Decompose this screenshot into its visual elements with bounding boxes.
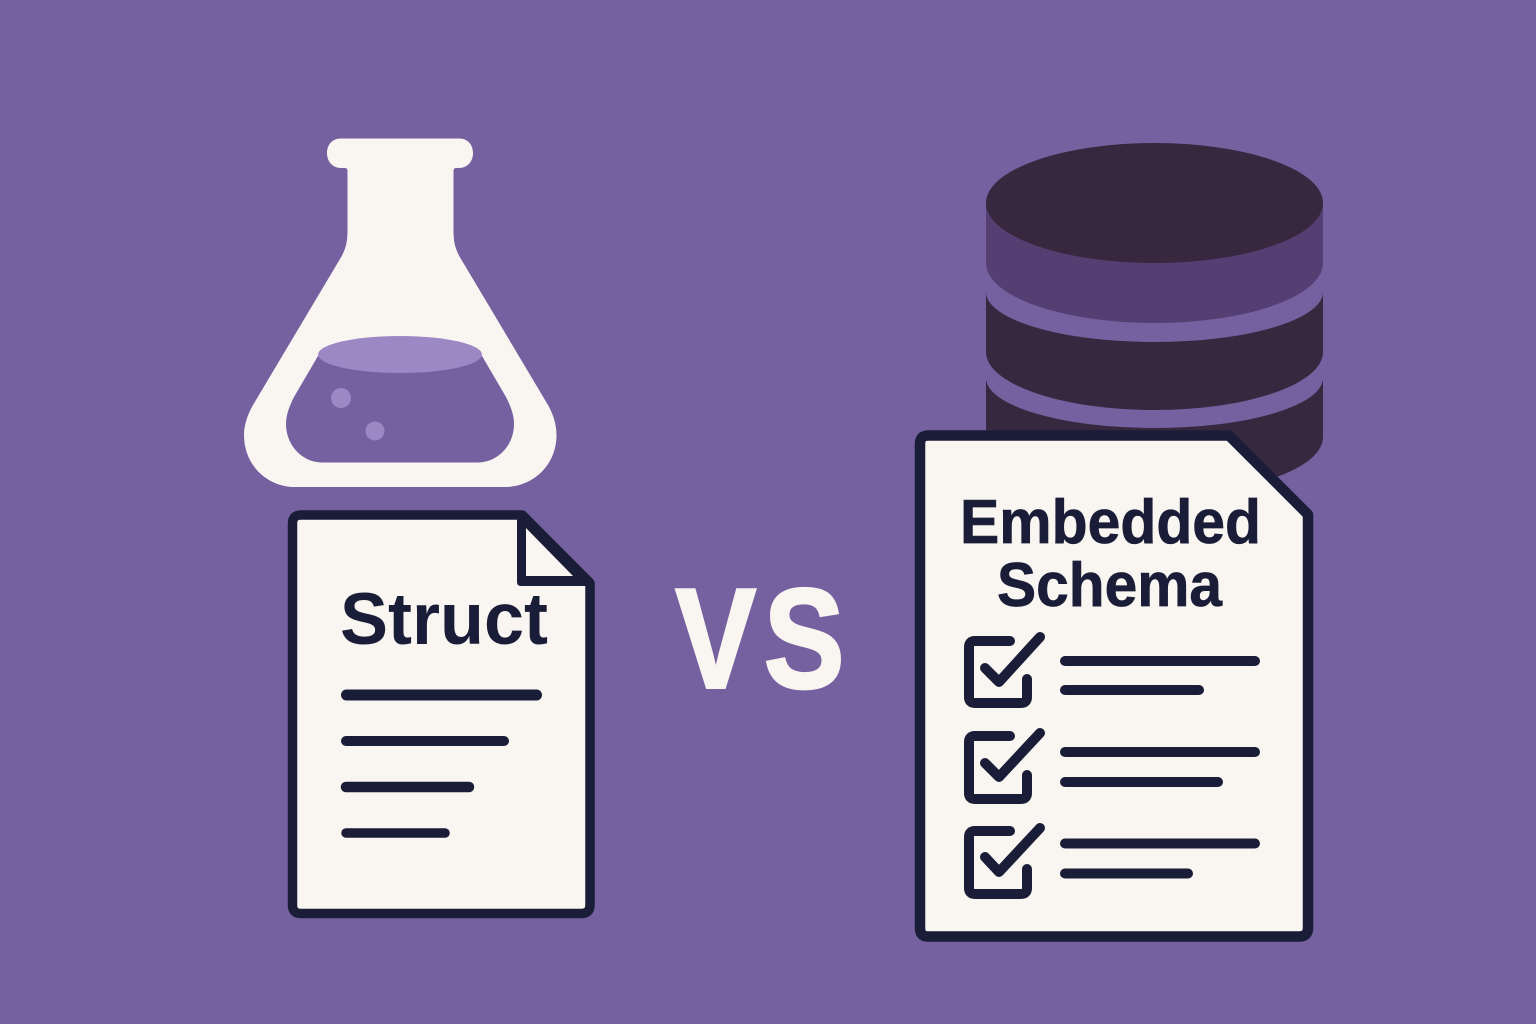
icon: flask (244, 138, 556, 487)
document: Embedded Schema (920, 436, 1308, 936)
checklist item 1 (969, 637, 1255, 703)
heading: Embedded Schema (960, 488, 1261, 620)
checklist item 3 (969, 828, 1255, 894)
text lines: Struct (346, 695, 536, 833)
checklist item 2 (969, 733, 1255, 799)
page fold (517, 515, 595, 586)
label: VS: VS (676, 559, 844, 718)
heading: Struct: Struct (340, 579, 548, 660)
heading: Embedded Schema: Embedded (960, 488, 1261, 557)
icon: database (986, 143, 1323, 495)
document: Struct (292, 515, 595, 914)
heading: Embedded Schema: Schema (997, 551, 1222, 620)
